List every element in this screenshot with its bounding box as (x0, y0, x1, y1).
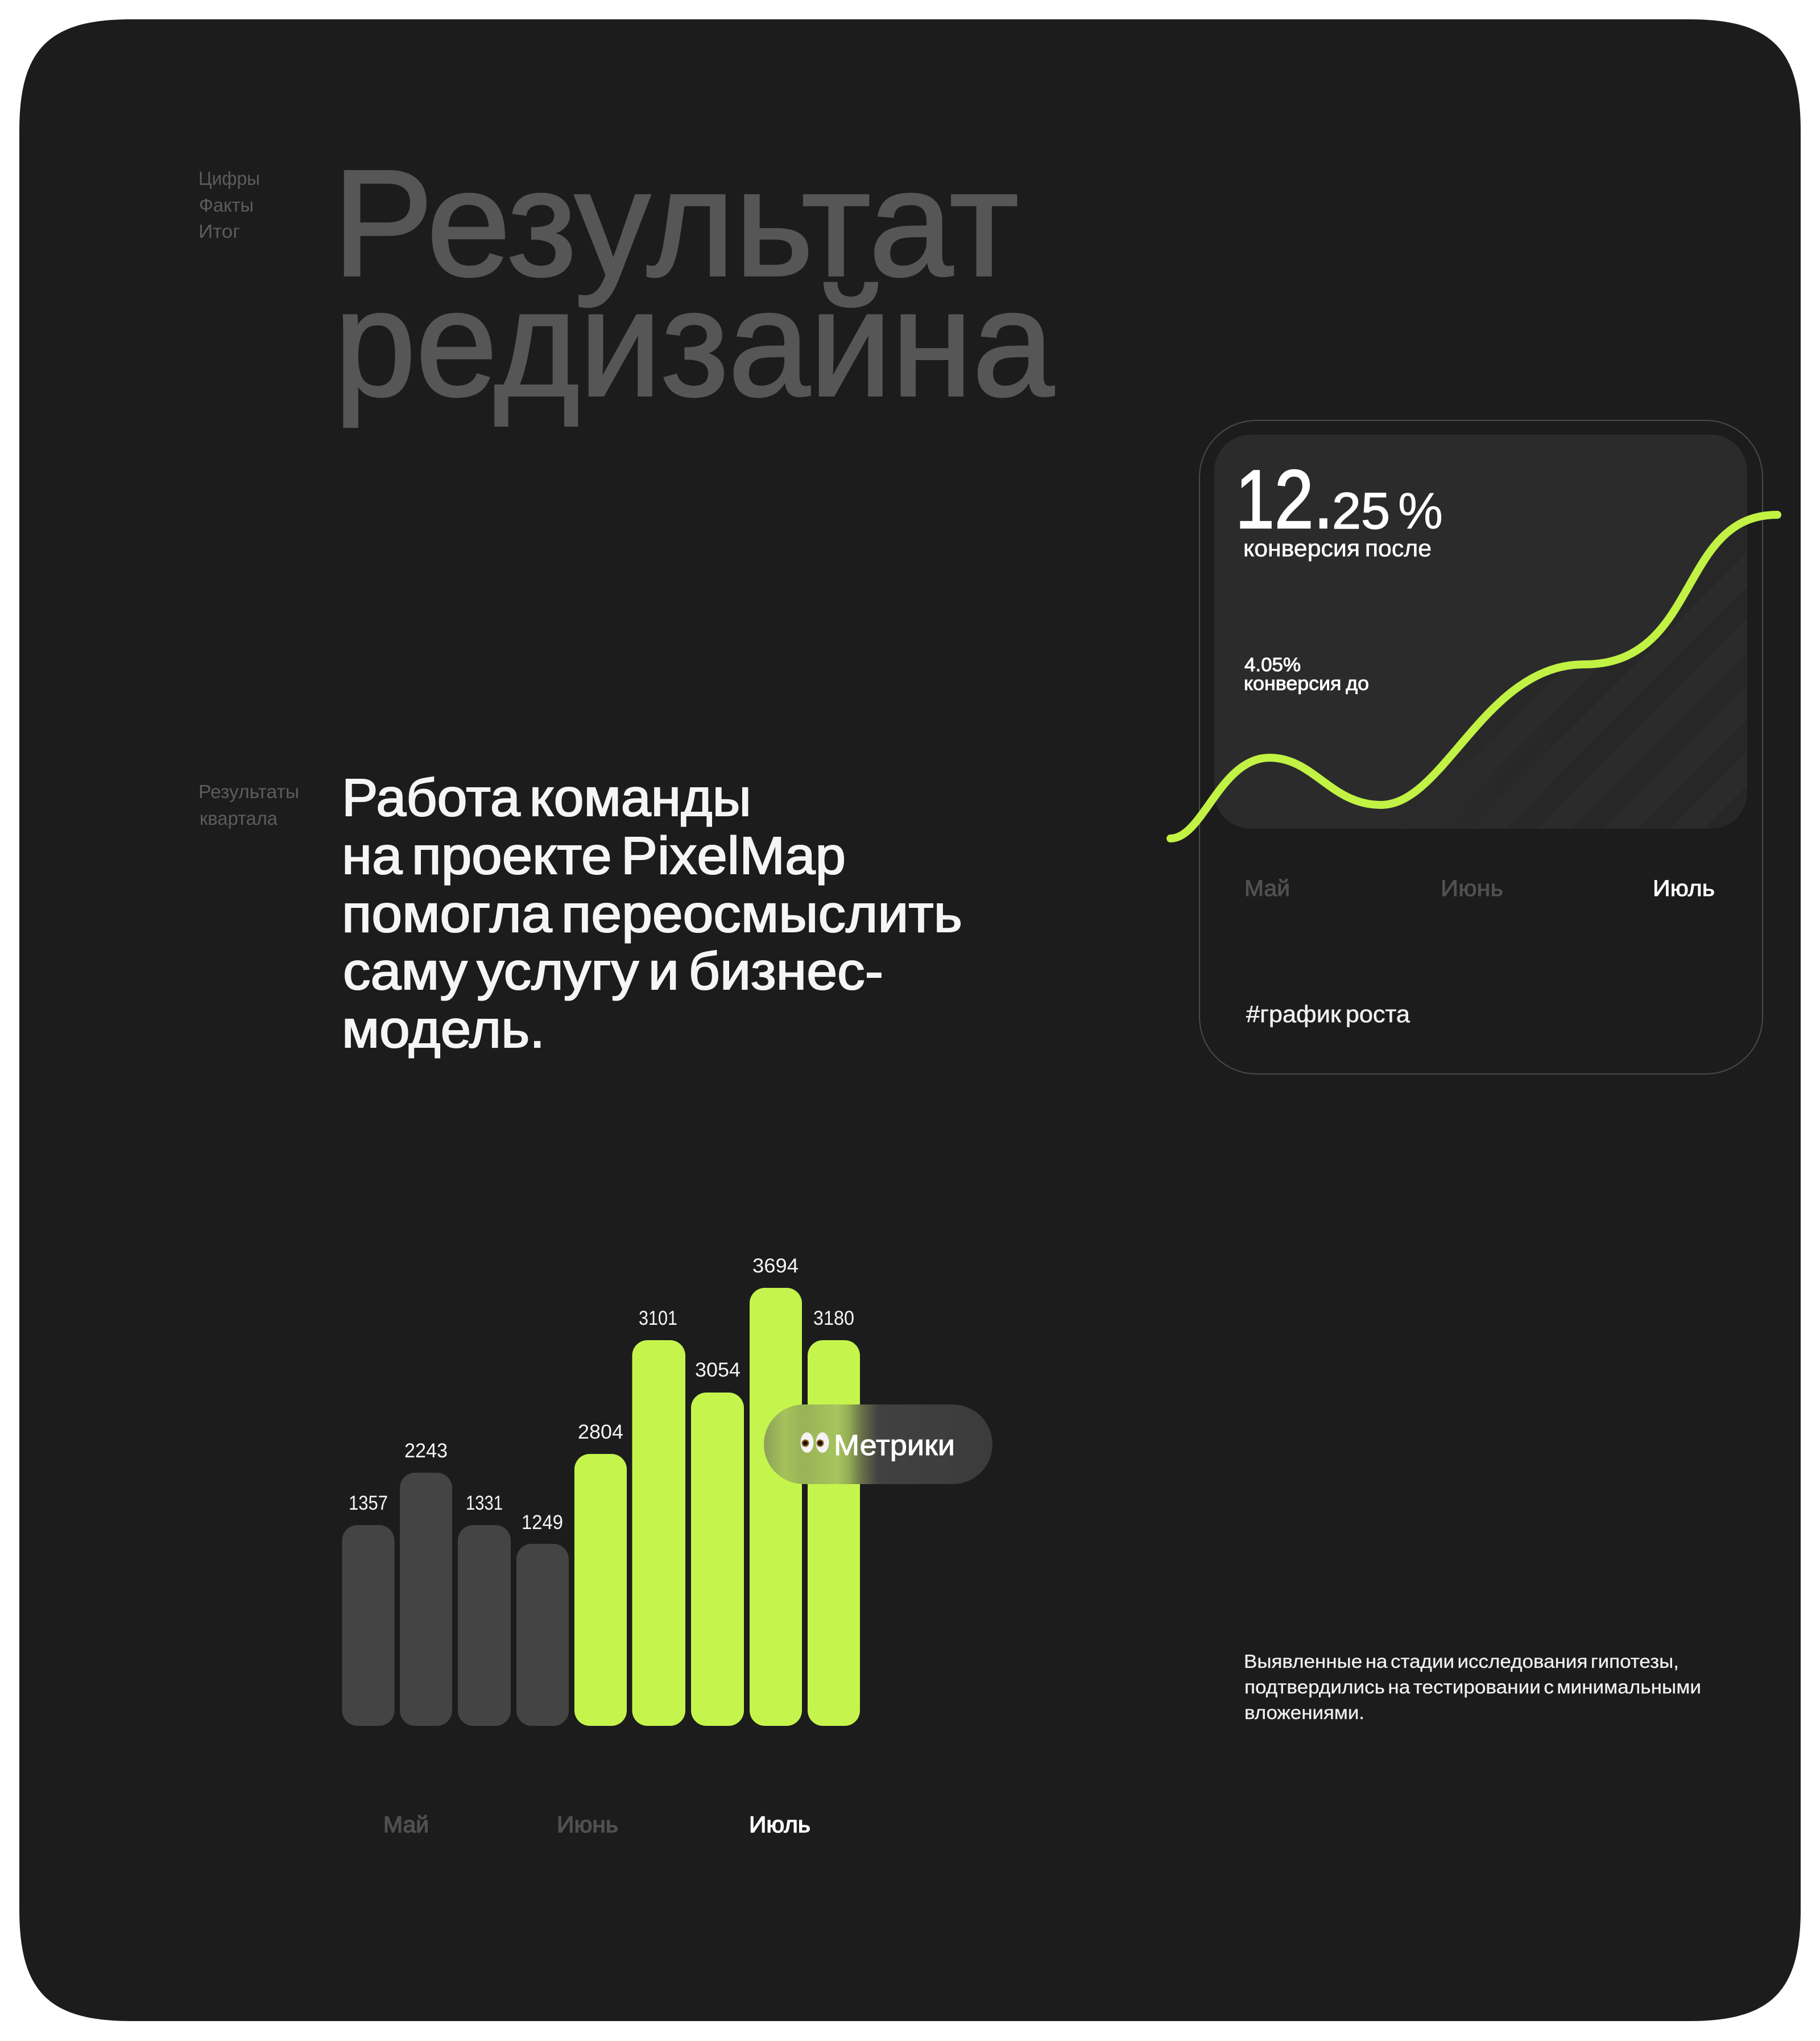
bar chart month axis: Июль (749, 1812, 810, 1837)
bar chart (342, 1255, 860, 1837)
card month axis: Июнь (1441, 876, 1503, 901)
footnote text: Выявленные на стадии исследования гипотезы, (1244, 1651, 1679, 1672)
card month axis: Май (1244, 876, 1290, 901)
bar value labels: 3054 (695, 1359, 741, 1381)
bar value labels: 3101 (639, 1307, 677, 1329)
highlighted bars: June and July (574, 1288, 860, 1726)
sidebar label: quarter results (198, 781, 299, 829)
label: conversion before (1244, 654, 1369, 695)
bar chart month axis (383, 1812, 810, 1837)
lead paragraph: модель. (342, 999, 545, 1059)
diagonal stripes under the curve (1297, 512, 1820, 853)
bar chart month axis: Июнь (557, 1812, 618, 1837)
lead paragraph (342, 768, 962, 1059)
label: conversion after: конверсия после (1243, 535, 1432, 561)
title: редизайна (334, 259, 1055, 428)
line chart curve (1170, 515, 1777, 838)
sidebar tags: figures, facts, result: Цифры (198, 168, 260, 189)
sidebar tags: figures, facts, result: Итог (198, 221, 240, 242)
bar value labels: 1331 (466, 1492, 503, 1514)
label: conversion before: конверсия до (1244, 673, 1369, 695)
card month axis: Июль (1653, 876, 1715, 901)
bar value labels: 2804 (578, 1421, 623, 1443)
hashtag: #график роста (1246, 1001, 1410, 1027)
bar value labels (349, 1255, 854, 1534)
card month axis (1244, 876, 1715, 901)
label: conversion before: 4.05% (1244, 654, 1301, 676)
bar chart month axis: Май (383, 1812, 429, 1837)
sidebar tags: figures, facts, result (198, 168, 260, 242)
panel: conversion growth card (1170, 420, 1820, 1074)
main figure: 12.25 %: 12. (1235, 453, 1333, 546)
bar value labels: 1249 (522, 1511, 563, 1534)
chart background panel (1214, 435, 1747, 829)
lead paragraph: Работа команды (342, 768, 751, 827)
lead paragraph: помогла переосмыслить (342, 884, 962, 943)
lead paragraph: на проекте PixelMap (342, 826, 846, 885)
title (333, 139, 1055, 428)
main figure: 12.25 % (1235, 453, 1443, 546)
bar value labels: 1357 (349, 1492, 388, 1514)
sidebar tags: figures, facts, result: Факты (199, 195, 254, 216)
title: Результат (333, 139, 1019, 308)
pill label: Метрики (834, 1429, 955, 1461)
sidebar label: quarter results: Результаты (198, 781, 299, 802)
main figure: 12.25 %: 25 (1332, 483, 1390, 540)
bar value labels: 3694 (752, 1255, 799, 1277)
lead paragraph: саму услугу и бизнес- (343, 941, 883, 1001)
bar value labels: 3180 (813, 1307, 854, 1329)
footnote text (1244, 1651, 1701, 1723)
metrics pill (764, 1404, 992, 1484)
main figure: 12.25 %: % (1398, 483, 1443, 540)
card outline (1199, 420, 1763, 1074)
bar value labels: 2243 (404, 1440, 448, 1462)
footnote text: вложениями. (1244, 1702, 1364, 1723)
icon: eyes (801, 1432, 829, 1453)
footnote text: подтвердились на тестировании с минимальными (1244, 1676, 1701, 1697)
muted bars: May (342, 1473, 569, 1726)
sidebar label: quarter results: квартала (200, 808, 278, 829)
